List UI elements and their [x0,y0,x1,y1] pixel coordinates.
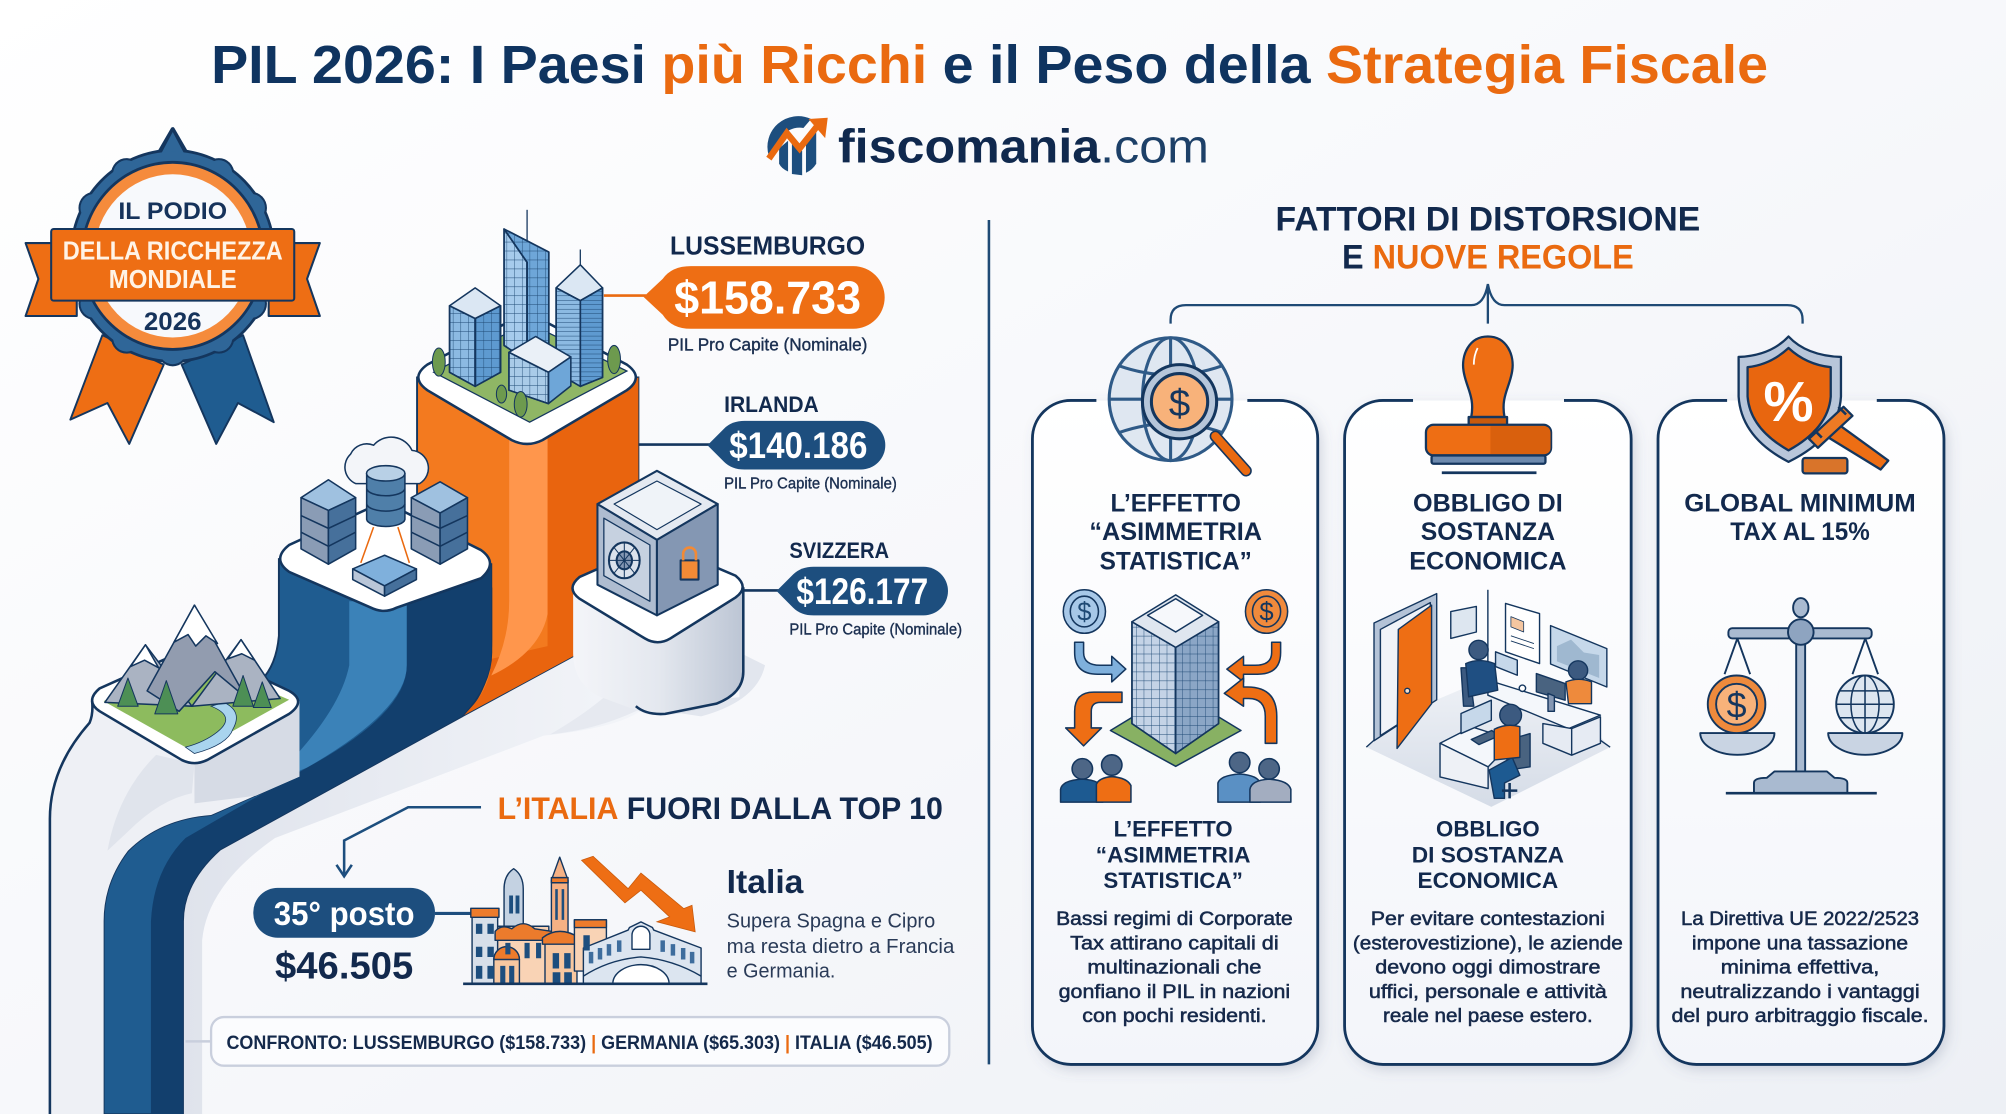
badge text: IL PODIO [118,198,227,225]
arrow: decline [582,856,695,932]
icon: skyscrapers [450,210,603,404]
label: svizzera: PIL Pro Capite (Nominale) [789,622,962,639]
icon: scales: $ [1727,686,1747,726]
label: lussemburgo: $158.733 [674,271,861,323]
card title [1409,490,1567,575]
card body text: con pochi residenti. [1082,1005,1267,1027]
card body text: gonfiano il PIL in nazioni [1059,981,1290,1003]
icon: globe magnifier [1109,338,1246,471]
badge text: 2026 [144,308,201,336]
label: lussemburgo [604,233,885,355]
back desk [1488,680,1600,729]
card title: TAX AL 15% [1730,518,1870,546]
title: PIL 2026: I Paesi più Ricchi e il Peso della Strategia Fiscale [211,35,1768,95]
card body text: uffici, personale e attività [1369,981,1608,1003]
icon: building with capital flows [1061,590,1291,802]
card body text [1353,908,1623,1027]
icon: shield with gavel: % [1763,370,1814,433]
italia rank [253,888,476,988]
card subtitle: DI SOSTANZA [1412,842,1564,867]
icon: cloud servers [301,437,467,596]
heading: italia fuori dalla top 10: L’ITALIA FUORI DALLA TOP 10 [498,791,943,826]
card body text: (esterovestizione), le aziende [1353,932,1623,954]
heading: fattori di distorsione: FATTORI DI DISTORSIONE [1275,200,1700,238]
card subtitle: OBBLIGO [1436,817,1540,842]
badge text: MONDIALE [109,266,237,294]
card subtitle: STATISTICA” [1103,868,1243,893]
label: irlanda [638,392,897,493]
card title: “ASIMMETRIA [1089,518,1262,546]
column: svizzera silver [573,542,743,715]
icon: building with capital flows: $ [1259,598,1274,626]
column: irlanda blue with flow [104,502,491,1114]
panel: global minimum tax [1658,336,1944,1064]
badge text: DELLA RICCHEZZA [63,238,283,266]
label: irlanda: PIL Pro Capite (Nominale) [724,476,897,493]
panel: effetto asimmetria statistica [1032,338,1318,1064]
callout: confronto: CONFRONTO: LUSSEMBURGO ($158.733) | GERMANIA ($65.303) | ITALIA ($46.505) [226,1033,933,1054]
label: svizzera [743,538,962,639]
scalloped seal [66,129,279,366]
logo wordmark: fiscomania .com [838,120,1209,173]
card body [1658,400,1944,1064]
icon: stamp [1426,336,1551,473]
tile: lussemburgo city [418,210,636,444]
label: lussemburgo: PIL Pro Capite (Nominale) [668,335,867,355]
text: italia note [727,864,955,982]
heading: fattori di distorsione: E NUOVE REGOLE [1342,239,1634,277]
back woman [1568,661,1588,680]
text: italia note: e Germania. [727,959,835,982]
label: irlanda: $140.186 [729,424,867,466]
card body text: Per evitare contestazioni [1371,908,1605,930]
label: irlanda: IRLANDA [724,392,819,417]
card body text: reale nel paese estero. [1383,1005,1593,1027]
label: lussemburgo: LUSSEMBURGO [670,233,865,261]
card subtitle: L’EFFETTO [1114,817,1233,842]
card body text: La Direttiva UE 2022/2523 [1681,908,1919,930]
card body [1345,400,1631,1064]
icon: office [1366,590,1610,807]
badge: il podio della ricchezza mondiale [26,129,320,444]
label: svizzera: $126.177 [796,570,928,612]
card subtitle [1096,817,1251,893]
heading: fattori di distorsione [1275,200,1700,277]
column: lussemburgo orange [417,377,638,716]
chart: podium columns [50,210,765,1114]
card body text [1671,908,1929,1027]
panel: obbligo di sostanza economica [1345,336,1631,1064]
card body [1032,400,1318,1064]
icon: venice skyline [463,857,707,984]
callout: confronto [186,1017,949,1066]
icon: building with capital flows: $ [1077,598,1091,626]
ribbon tails [70,335,274,444]
logo: fiscomania.com [767,116,1209,175]
card body text: neutralizzando i vantaggi [1680,981,1920,1003]
text: italia note: Supera Spagna e Cipro [727,910,935,933]
card subtitle: “ASIMMETRIA [1096,842,1251,867]
card body text: impone una tassazione [1692,932,1908,954]
text: italia note: ma resta dietro a Francia [727,935,955,958]
front person [1507,734,1530,770]
card body text: multinazionali che [1087,957,1261,979]
front desk [1440,727,1514,767]
card title [1684,490,1916,546]
label: svizzera: SVIZZERA [789,538,889,563]
card title [1089,490,1262,575]
card title: GLOBAL MINIMUM [1684,490,1916,518]
card title: ECONOMICA [1409,547,1567,575]
card subtitle: ECONOMICA [1418,868,1558,893]
icon: scales [1700,598,1902,793]
column: italia white with flow [50,646,299,1114]
icon: globe magnifier: $ [1169,382,1190,425]
card body text [1056,908,1293,1027]
card body text: devono oggi dimostrare [1375,957,1600,979]
card body text: del puro arbitraggio fiscale. [1671,1005,1929,1027]
ribbon banner [26,229,320,316]
card body text: minima effettiva, [1721,957,1879,979]
text: italia note: Italia [727,864,804,901]
italia rank: $46.505 [275,945,413,988]
card body text: Tax attirano capitali di [1070,932,1279,954]
badge text [63,198,283,336]
back person [1461,668,1474,706]
italia rank: 35° posto [274,896,415,933]
bracket [1171,284,1803,324]
flow: svizzera band [183,640,646,1114]
arrow: to italia rank [336,807,481,876]
icon: shield with gavel [1739,336,1888,473]
card title: SOSTANZA [1421,518,1555,546]
icon: mountains [105,605,280,714]
card subtitle [1412,817,1564,893]
card title: L’EFFETTO [1110,490,1241,518]
card title: OBBLIGO DI [1413,490,1563,518]
icon: logo chart [767,116,828,175]
icon: trees [432,345,620,417]
card body text: Bassi regimi di Corporate [1056,908,1293,930]
icon: safe [597,471,718,615]
card title: STATISTICA” [1100,547,1252,575]
